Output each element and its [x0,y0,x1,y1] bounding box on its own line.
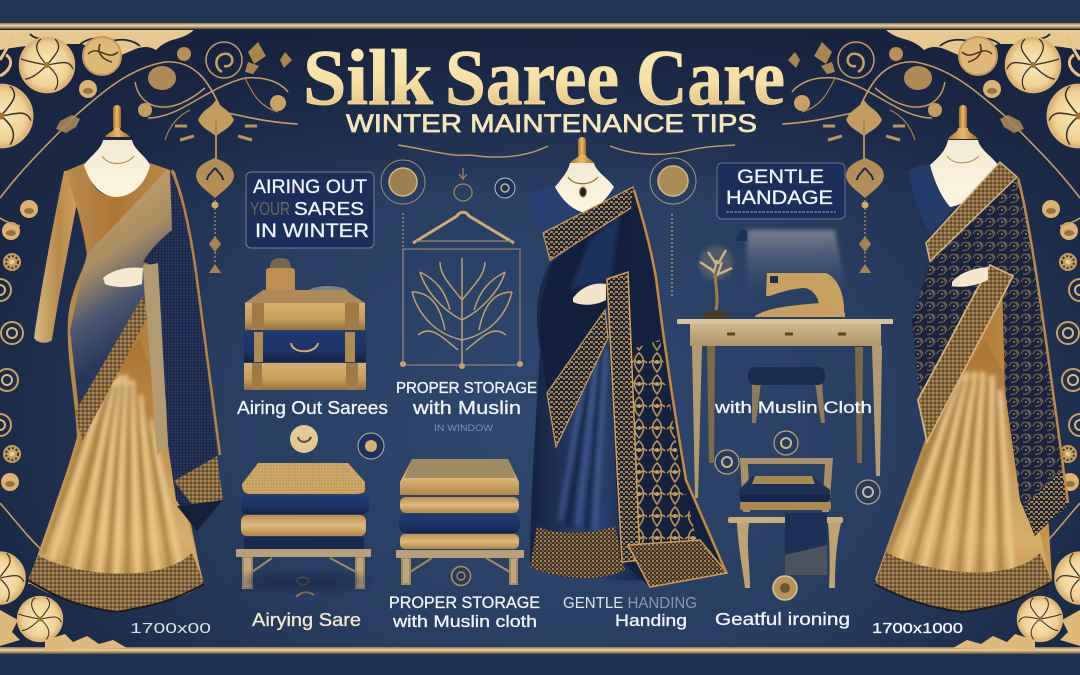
icon: ring below chair [773,576,797,600]
label: size left: 1700x00 [130,620,211,637]
gold layer [241,515,366,536]
right hand [952,267,988,287]
right skirt [875,340,1052,607]
blue layer [241,496,369,514]
plate [308,286,348,298]
mannequin centre [530,137,727,587]
ornament: top-right floral corner [782,30,1080,273]
centre skirt [530,262,660,581]
gold layer lower [400,534,519,549]
callout: airing out: YOUR [250,199,290,219]
callout: gentle handage: HANDAGE [726,188,833,209]
left sash [70,170,190,420]
bench legs [402,558,517,584]
right pallu gold edge [1018,178,1068,503]
icon: squiggle seal [296,577,314,597]
hanger bar [416,240,511,242]
right blouse [908,164,960,235]
centre bodice drape [540,200,652,392]
label: with muslin cloth lower: with Muslin cloth [392,612,537,631]
centre shoulder border [543,187,637,260]
left pallu gold edge [172,170,220,455]
callout: airing out [246,172,374,248]
label: with muslin: with Muslin [412,397,521,418]
lamp light [747,230,850,310]
dotted beads right [671,214,673,297]
right body gold [875,270,1052,580]
mannequin left [28,105,223,612]
right patterned pallu [990,177,1067,536]
navy layer [399,514,520,533]
back legs [707,345,863,463]
label: airing out sarees: Airing Out Sarees [237,398,388,418]
ornament: right edge motifs [953,200,1080,650]
icon: ring seal [358,433,384,459]
book stack [244,258,366,390]
top gold rule [0,23,1080,29]
left arm [34,170,82,343]
right pallu end border [1026,470,1068,536]
label: airying sare: Airying Sare [252,610,361,630]
ornament: top-left floral corner [0,30,298,273]
gold book [245,303,365,330]
bench legs [243,557,364,588]
title: Saree [445,35,619,122]
centre blouse [530,185,620,262]
label: proper storage lower: PROPER STORAGE [389,594,540,612]
left bust [84,140,150,197]
left drape [143,263,168,455]
left hand [103,267,143,287]
label: gentle handing: GENTLE HANDING [563,595,697,612]
centre skirt pleats [560,345,606,530]
centre pallu tip border [628,540,727,587]
navy layer [244,537,364,549]
front legs [692,346,882,498]
label: faint sub text: IN WINDOW [434,423,493,434]
top band [0,0,1080,23]
right patterned bodice [912,177,1018,400]
top cloth [242,463,365,494]
label: handing: Handing [615,611,687,630]
callout: airing out: AIRING OUT [253,177,367,198]
stool [748,367,825,423]
left neck stand [105,105,130,137]
label: size right: 1700x1000 [872,620,963,637]
right neck stand [948,105,978,139]
left pleats [42,375,180,585]
icon: clothes hanger [413,212,514,243]
table apron [690,324,881,346]
sewing machine [755,273,845,317]
left necklace [102,156,134,164]
title: Care [636,35,785,122]
icon: bench seal [452,566,470,586]
right necklace [947,156,979,163]
icon: ring right of chair [856,480,880,504]
centre pallu ornament [628,340,698,560]
subtitle: WINTER MAINTENANCE TIPS [346,110,757,138]
chair with folded saree [728,458,843,588]
left blouse and body [28,163,203,584]
callout: airing out: IN WINTER [255,221,369,242]
right pleats [888,372,1012,585]
centre bust [555,163,614,213]
icon: hanger motif [454,168,472,201]
left saree stack on bench [236,463,371,589]
label: proper storage upper: PROPER STORAGE [396,380,537,397]
centre hem band [530,526,625,578]
gold book lower [244,363,366,390]
icon: ring medallion left [381,160,425,204]
dotted beads left [402,213,404,365]
icon: ring left of chair [715,450,739,474]
ornament: left edge motifs [0,200,127,650]
label: with muslin cloth table: with Muslin Cloth [714,398,872,417]
centre pallu inner border [607,272,640,562]
drawer pulls [727,332,846,336]
table scene [677,230,893,498]
right hem band [875,552,1052,612]
folded cloth on chair [739,476,831,510]
top cloth [400,459,519,495]
centre necklace [568,177,598,197]
left pallu tip [177,500,223,531]
centre diagonal border [547,310,608,447]
mannequin right [875,105,1068,612]
right hem edge [875,582,1052,612]
icon: ring above chair [774,431,798,455]
right shoulder border [926,162,1017,261]
callout: gentle handage: GENTLE [737,167,824,188]
blue book [244,332,366,362]
centre pallu [606,188,727,587]
left border band [75,296,147,441]
label: geatful ironing: Geatful ironing [715,609,850,629]
bench top [236,549,371,557]
left pallu [143,170,222,531]
jar [266,258,295,299]
centre hand [573,284,606,305]
hanging cloth [785,513,827,575]
right bust [930,140,998,207]
flourish lines under subtitle [398,145,735,157]
small tree [699,246,733,318]
right saree stack on bench [396,459,524,584]
centre neck stand [570,137,594,163]
bottom band [0,654,1080,675]
icon: gold seal [290,425,318,453]
frame with tree of life [400,249,523,369]
icon: small ring [495,178,515,198]
icon: ring medallion right [650,158,696,204]
bench shadow [242,575,366,589]
gold layer [400,497,519,513]
left pallu border [174,456,223,511]
left hem edge [28,580,204,612]
centre pallu gold edge [634,190,726,572]
left hem band [28,553,204,612]
right diagonal border [918,265,1013,442]
callout: gentle handage [717,163,845,219]
callout: airing out: SARES [294,199,364,219]
table top [677,319,893,324]
bottom gold rule [0,647,1080,654]
left skirt [28,340,204,606]
lamp bracket [735,230,747,241]
upper background shade [0,29,1080,199]
bench top [396,550,524,558]
title: Silk [303,35,433,122]
